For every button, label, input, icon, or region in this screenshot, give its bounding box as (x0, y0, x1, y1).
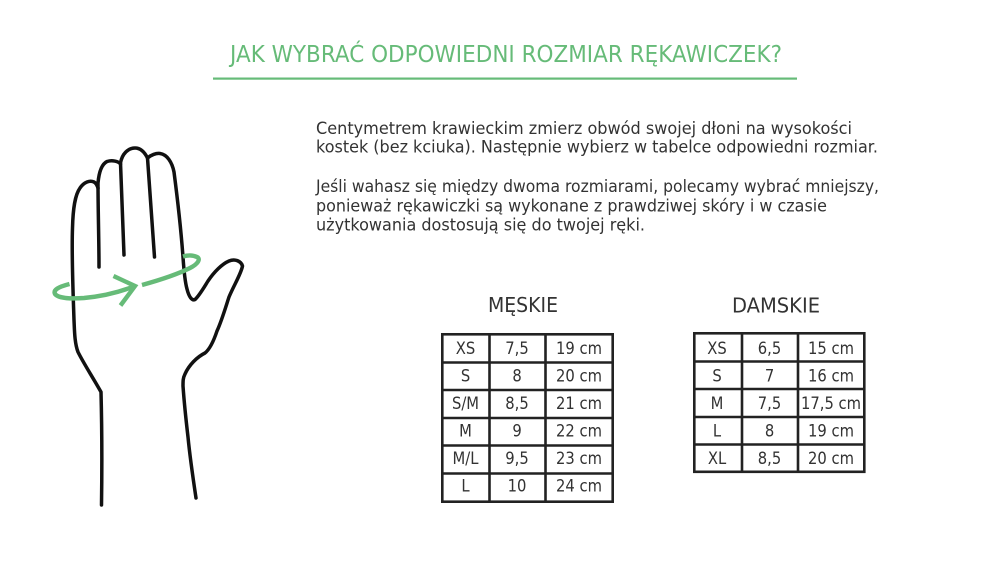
icon: green measuring loop with arrow (55, 255, 199, 306)
text block: measuring instructions: kostek (bez kciuka). Następnie wybierz w tabelce odpowiedni rozmiar. (316, 136, 878, 156)
table: men's sizes: S (461, 367, 470, 386)
table: men's sizes: 9 (512, 422, 522, 441)
table: men's sizes: 7,5 (505, 339, 529, 358)
table: women's sizes: 15 cm (808, 339, 854, 358)
table: men's sizes: 8 (512, 367, 522, 386)
table: men's sizes: 9,5 (505, 449, 529, 468)
table: men's sizes: 20 cm (556, 367, 602, 386)
table: women's sizes: 7 (765, 367, 774, 386)
text block: size advice: ponieważ rękawiczki są wykonane z prawdziwej skóry i w czasie (316, 196, 827, 216)
text block: size advice: użytkowania dostosują się do twojej ręki. (316, 214, 645, 234)
table: women's sizes: 6,5 (758, 339, 781, 358)
table: men's sizes: L (461, 477, 470, 496)
table: men's sizes: M (459, 422, 472, 441)
table: men's sizes: 23 cm (556, 449, 602, 468)
table: men's sizes: 22 cm (556, 422, 602, 441)
text block: measuring instructions (316, 118, 878, 156)
table: women's sizes: 16 cm (808, 367, 854, 386)
table: women's sizes: M (711, 394, 723, 413)
table: women's sizes: S (712, 367, 722, 386)
text block: size advice (315, 176, 879, 234)
table: men's sizes: XS (456, 339, 475, 358)
table: men's sizes (442, 334, 613, 502)
table: women's sizes: 19 cm (808, 422, 854, 441)
table: women's sizes: 8 (765, 422, 774, 441)
text block: size advice: Jeśli wahasz się między dwoma rozmiarami, polecamy wybrać mniejszy, (315, 176, 879, 196)
table: women's sizes: 8,5 (758, 449, 781, 468)
heading: women's sizes: DAMSKIE (732, 294, 820, 318)
table: men's sizes: 19 cm (556, 339, 602, 358)
table: women's sizes: 20 cm (808, 449, 854, 468)
table: women's sizes (694, 333, 864, 472)
text block: measuring instructions: Centymetrem krawieckim zmierz obwód swojej dłoni na wysokości (316, 118, 852, 138)
table: men's sizes: M/L (453, 449, 479, 468)
table: women's sizes: XS (707, 339, 727, 358)
table: men's sizes: 10 (508, 477, 526, 496)
table: men's sizes: 21 cm (556, 394, 602, 413)
table: women's sizes: L (713, 422, 721, 441)
icon: hand outline (72, 148, 242, 505)
table: women's sizes: 17,5 cm (801, 394, 861, 413)
table: women's sizes: 7,5 (758, 394, 781, 413)
table: men's sizes: S/M (452, 394, 479, 413)
table: men's sizes: 8,5 (505, 394, 529, 413)
heading: men's sizes: MĘSKIE (488, 293, 558, 317)
table: women's sizes: XL (708, 449, 726, 468)
title: JAK WYBRAĆ ODPOWIEDNI ROZMIAR RĘKAWICZEK? (228, 40, 782, 68)
table: men's sizes: 24 cm (556, 477, 602, 496)
